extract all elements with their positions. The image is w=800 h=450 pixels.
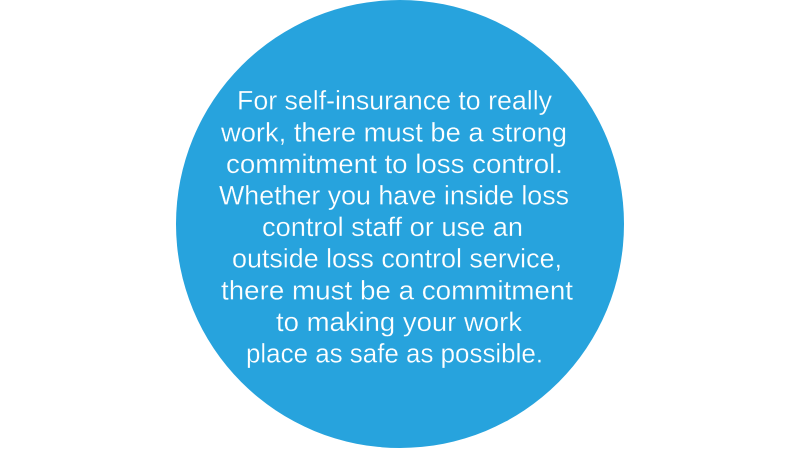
callout text block: work, there must be a strong: [220, 118, 567, 148]
callout text block: place as safe as possible.: [246, 338, 543, 368]
callout text block: Whether you have inside loss: [219, 180, 569, 210]
blue circle panel: [176, 0, 624, 448]
callout text block: outside loss control service,: [232, 244, 562, 274]
callout text block: [219, 86, 574, 368]
callout text block: control staff or use an: [262, 212, 523, 242]
callout text block: there must be a commitment: [221, 276, 574, 306]
callout text block: For self-insurance to really: [237, 86, 553, 116]
callout text block: commitment to loss control.: [226, 149, 563, 179]
callout text block: to making your work: [276, 307, 523, 337]
